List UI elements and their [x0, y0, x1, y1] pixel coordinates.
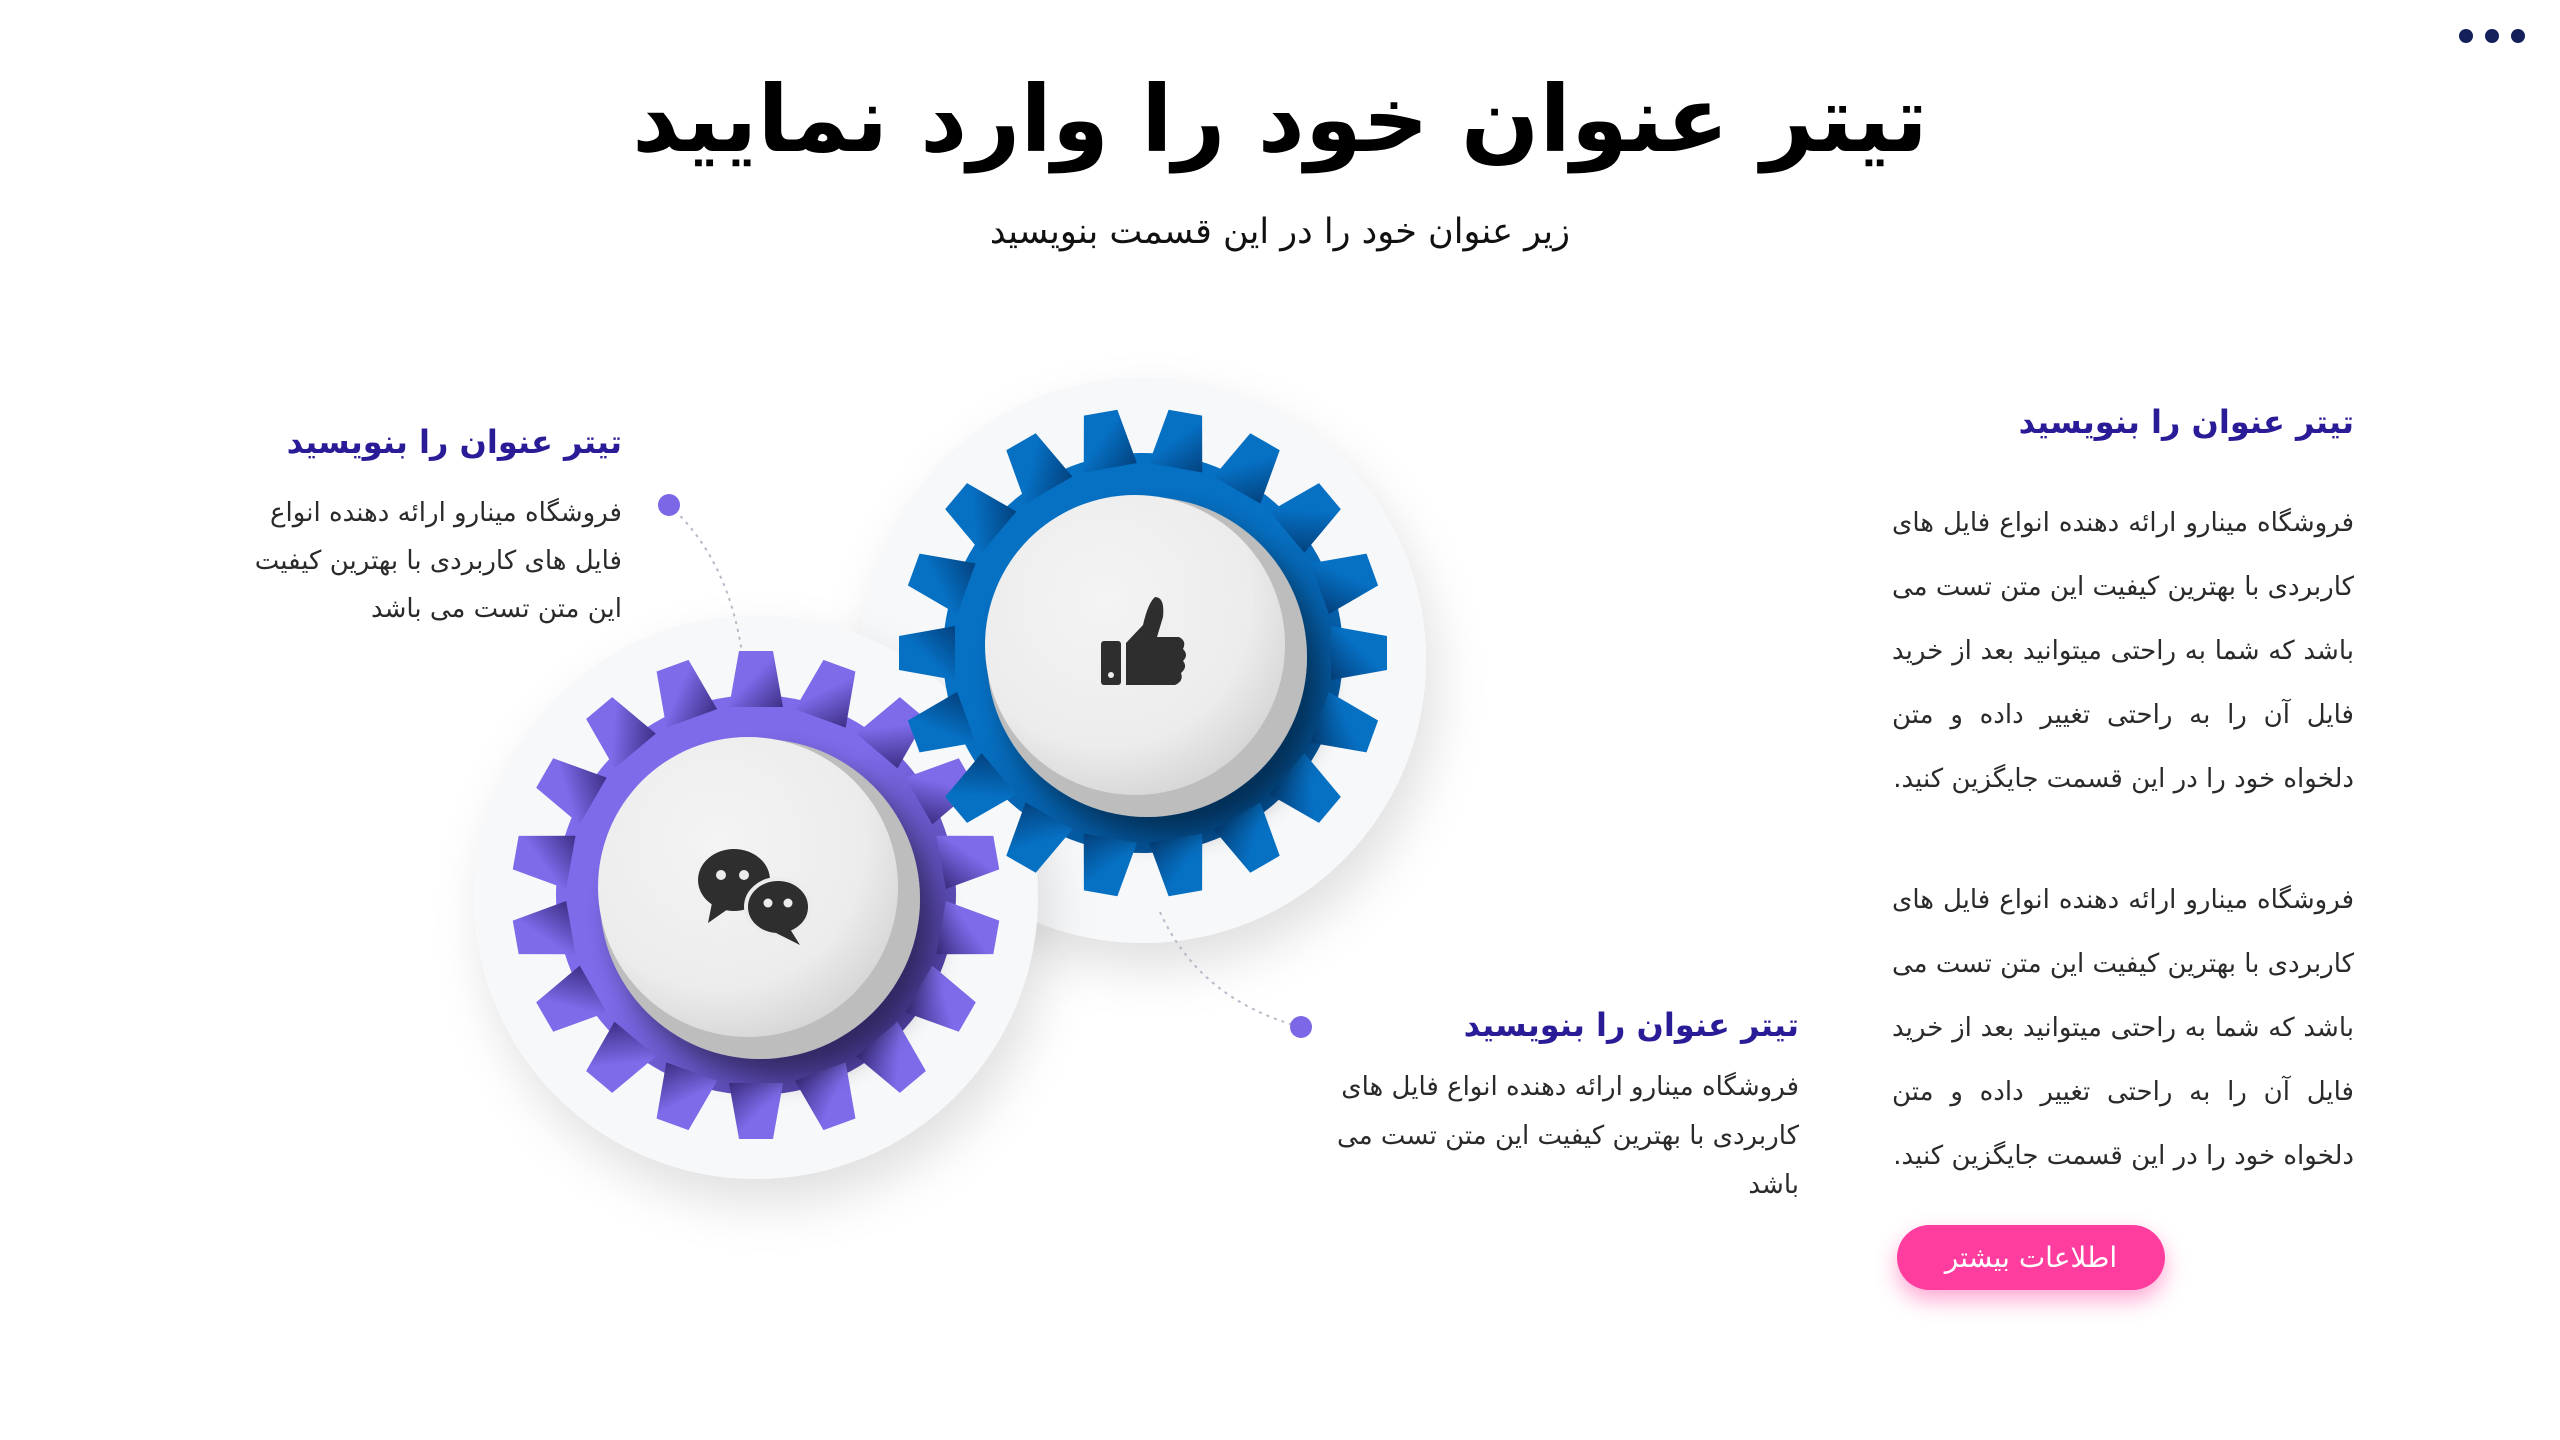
button: more info: اطلاعات بیشتر	[1945, 1241, 2117, 1274]
icon: thumbs up	[1101, 597, 1186, 685]
paragraph: این متن تست می باشد	[371, 594, 622, 624]
icon: chat	[698, 849, 810, 945]
paragraph	[255, 498, 622, 624]
halo: blue	[860, 377, 1426, 943]
paragraph 2: دلخواه خود را در این قسمت جایگزین کنید.	[1893, 1141, 2354, 1171]
paragraph 1: دلخواه خود را در این قسمت جایگزین کنید.	[1893, 764, 2354, 794]
text block: bottom	[1337, 1006, 1799, 1200]
paragraph 1: کاربردی با بهترین کیفیت این متن تست می	[1892, 572, 2354, 602]
button: more info	[1897, 1225, 2165, 1290]
menu dots	[2459, 29, 2525, 43]
paragraph 2: فروشگاه مینارو ارائه دهنده انواع فایل های	[1892, 885, 2354, 915]
paragraph 2: فایل آن را به راحتی تغییر داده و متن	[1892, 1077, 2354, 1107]
gear: purple with chat icon	[511, 651, 1001, 1139]
paragraph 2: باشد که شما به راحتی میتوانید بعد از خرید	[1892, 1013, 2354, 1043]
paragraph 1: فروشگاه مینارو ارائه دهنده انواع فایل های	[1892, 508, 2354, 538]
paragraph 1: باشد که شما به راحتی میتوانید بعد از خرید	[1892, 636, 2354, 666]
paragraph 1: فایل آن را به راحتی تغییر داده و متن	[1892, 700, 2354, 730]
text block: left	[255, 423, 622, 624]
heading: تیتر عنوان را بنویسید	[287, 423, 622, 461]
paragraph: فروشگاه مینارو ارائه دهنده انواع فایل های	[1341, 1072, 1799, 1102]
dot: bottom	[1290, 1016, 1312, 1038]
connector: bottom	[1160, 912, 1301, 1027]
paragraph: کاربردی با بهترین کیفیت این متن تست می	[1337, 1121, 1799, 1151]
dot: left	[658, 494, 680, 516]
paragraph 1	[1892, 508, 2354, 794]
paragraph: فایل های کاربردی با بهترین کیفیت	[255, 546, 622, 576]
heading: تیتر عنوان را بنویسید	[1464, 1006, 1799, 1044]
subtitle: زیر عنوان خود را در این قسمت بنویسید	[990, 212, 1570, 252]
paragraph: فروشگاه مینارو ارائه دهنده انواع	[270, 498, 622, 528]
gear: blue with thumbs up icon	[859, 370, 1427, 936]
paragraph 2	[1892, 884, 2354, 1171]
title: تیتر عنوان خود را وارد نمایید	[632, 66, 1928, 173]
text block: right	[1892, 403, 2354, 1171]
heading: تیتر عنوان را بنویسید	[2019, 403, 2354, 441]
paragraph	[1337, 1072, 1799, 1200]
paragraph 2: کاربردی با بهترین کیفیت این متن تست می	[1892, 949, 2354, 979]
paragraph: باشد	[1748, 1170, 1799, 1200]
connector: left	[669, 505, 743, 660]
halo: purple	[474, 615, 1038, 1179]
